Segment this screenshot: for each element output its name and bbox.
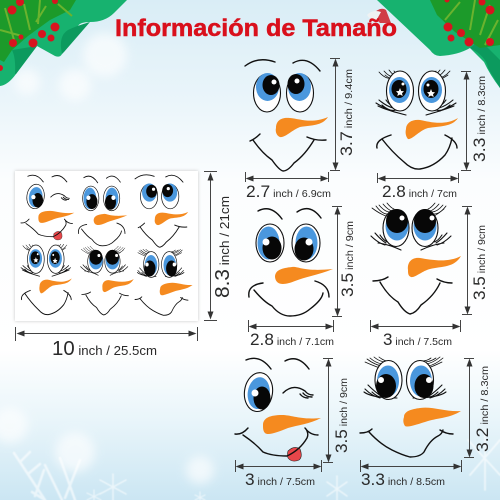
panel: sticker sheet — [15, 171, 198, 321]
dimension: 3 inch wide: 3 inch / 7.5cm — [383, 330, 452, 349]
dimension: 3.5 inch tall — [462, 206, 489, 314]
dimension: 3.7 inch tall: 3.7 inch / 9.4cm — [337, 69, 356, 156]
sticker: face with round eyes — [249, 209, 333, 316]
background: bokeh highlights — [0, 33, 214, 484]
sheet width dimension: 10 inch / 25.5cm — [52, 338, 157, 360]
dimension: 3.3 inch tall — [461, 72, 489, 170]
sticker: face with star eyes — [376, 70, 458, 169]
dimension: 3 inch wide — [236, 460, 322, 489]
sticker: winking face with tongue — [235, 358, 321, 461]
sticker: face with long lashes — [360, 357, 461, 457]
dimension: 3.5 inch tall: 3.5 inch / 9cm — [338, 221, 357, 297]
sheet face: round eyes — [78, 176, 127, 246]
sheet width dimension — [16, 327, 198, 360]
dimension: 2.7 inch wide: 2.7 inch / 6.9cm — [246, 182, 331, 201]
dimension: 3.5 inch tall: 3.5 inch / 9cm — [332, 378, 351, 453]
dimension: 2.8 inch wide — [378, 173, 458, 201]
sheet face: looking up — [135, 175, 188, 247]
dimension: 3.5 inch tall: 3.5 inch / 9cm — [470, 225, 489, 300]
dimension: 3.5 inch tall — [323, 358, 351, 462]
dimension: 2.8 inch wide — [248, 320, 334, 349]
dimension: 2.7 inch wide — [246, 172, 331, 201]
sheet face: large pupils — [81, 246, 134, 315]
dimension: 3 inch wide: 3 inch / 7.5cm — [245, 470, 315, 489]
dimension: 2.8 inch wide: 2.8 inch / 7.1cm — [250, 330, 334, 349]
dimension: 3.5 inch tall — [332, 206, 357, 316]
dimension: 3.2 inch tall — [464, 358, 492, 458]
sheet face: long lashes — [135, 249, 193, 315]
sheet background — [15, 171, 198, 321]
dimension: 3 inch wide — [370, 320, 460, 349]
sheet height dimension: 8.3 inch / 21cm — [212, 196, 234, 298]
sheet height dimension — [204, 172, 234, 320]
dimension: 3.3 inch wide — [360, 460, 462, 489]
sheet face: winking — [21, 175, 74, 240]
dimension: 3.2 inch tall: 3.2 inch / 8.3cm — [473, 366, 492, 452]
decoration: top-left leaves and berries — [0, 0, 127, 86]
sheet face: star eyes — [21, 244, 72, 315]
title: Información de Tamaño — [115, 15, 397, 42]
decoration: top-right leaves and berries — [377, 0, 500, 88]
dimension: 3.3 inch wide: 3.3 inch / 8.5cm — [361, 470, 445, 489]
dimension: 2.8 inch wide: 2.8 inch / 7cm — [382, 182, 457, 201]
sticker: face with large pupils — [371, 203, 461, 314]
sticker: face looking up — [245, 60, 328, 171]
dimension: 3.7 inch tall — [330, 58, 356, 170]
snowflakes: bottom corners — [14, 430, 500, 500]
dimension: 3.3 inch tall: 3.3 inch / 8.3cm — [470, 76, 489, 162]
icon: santa hat on title — [367, 9, 391, 23]
